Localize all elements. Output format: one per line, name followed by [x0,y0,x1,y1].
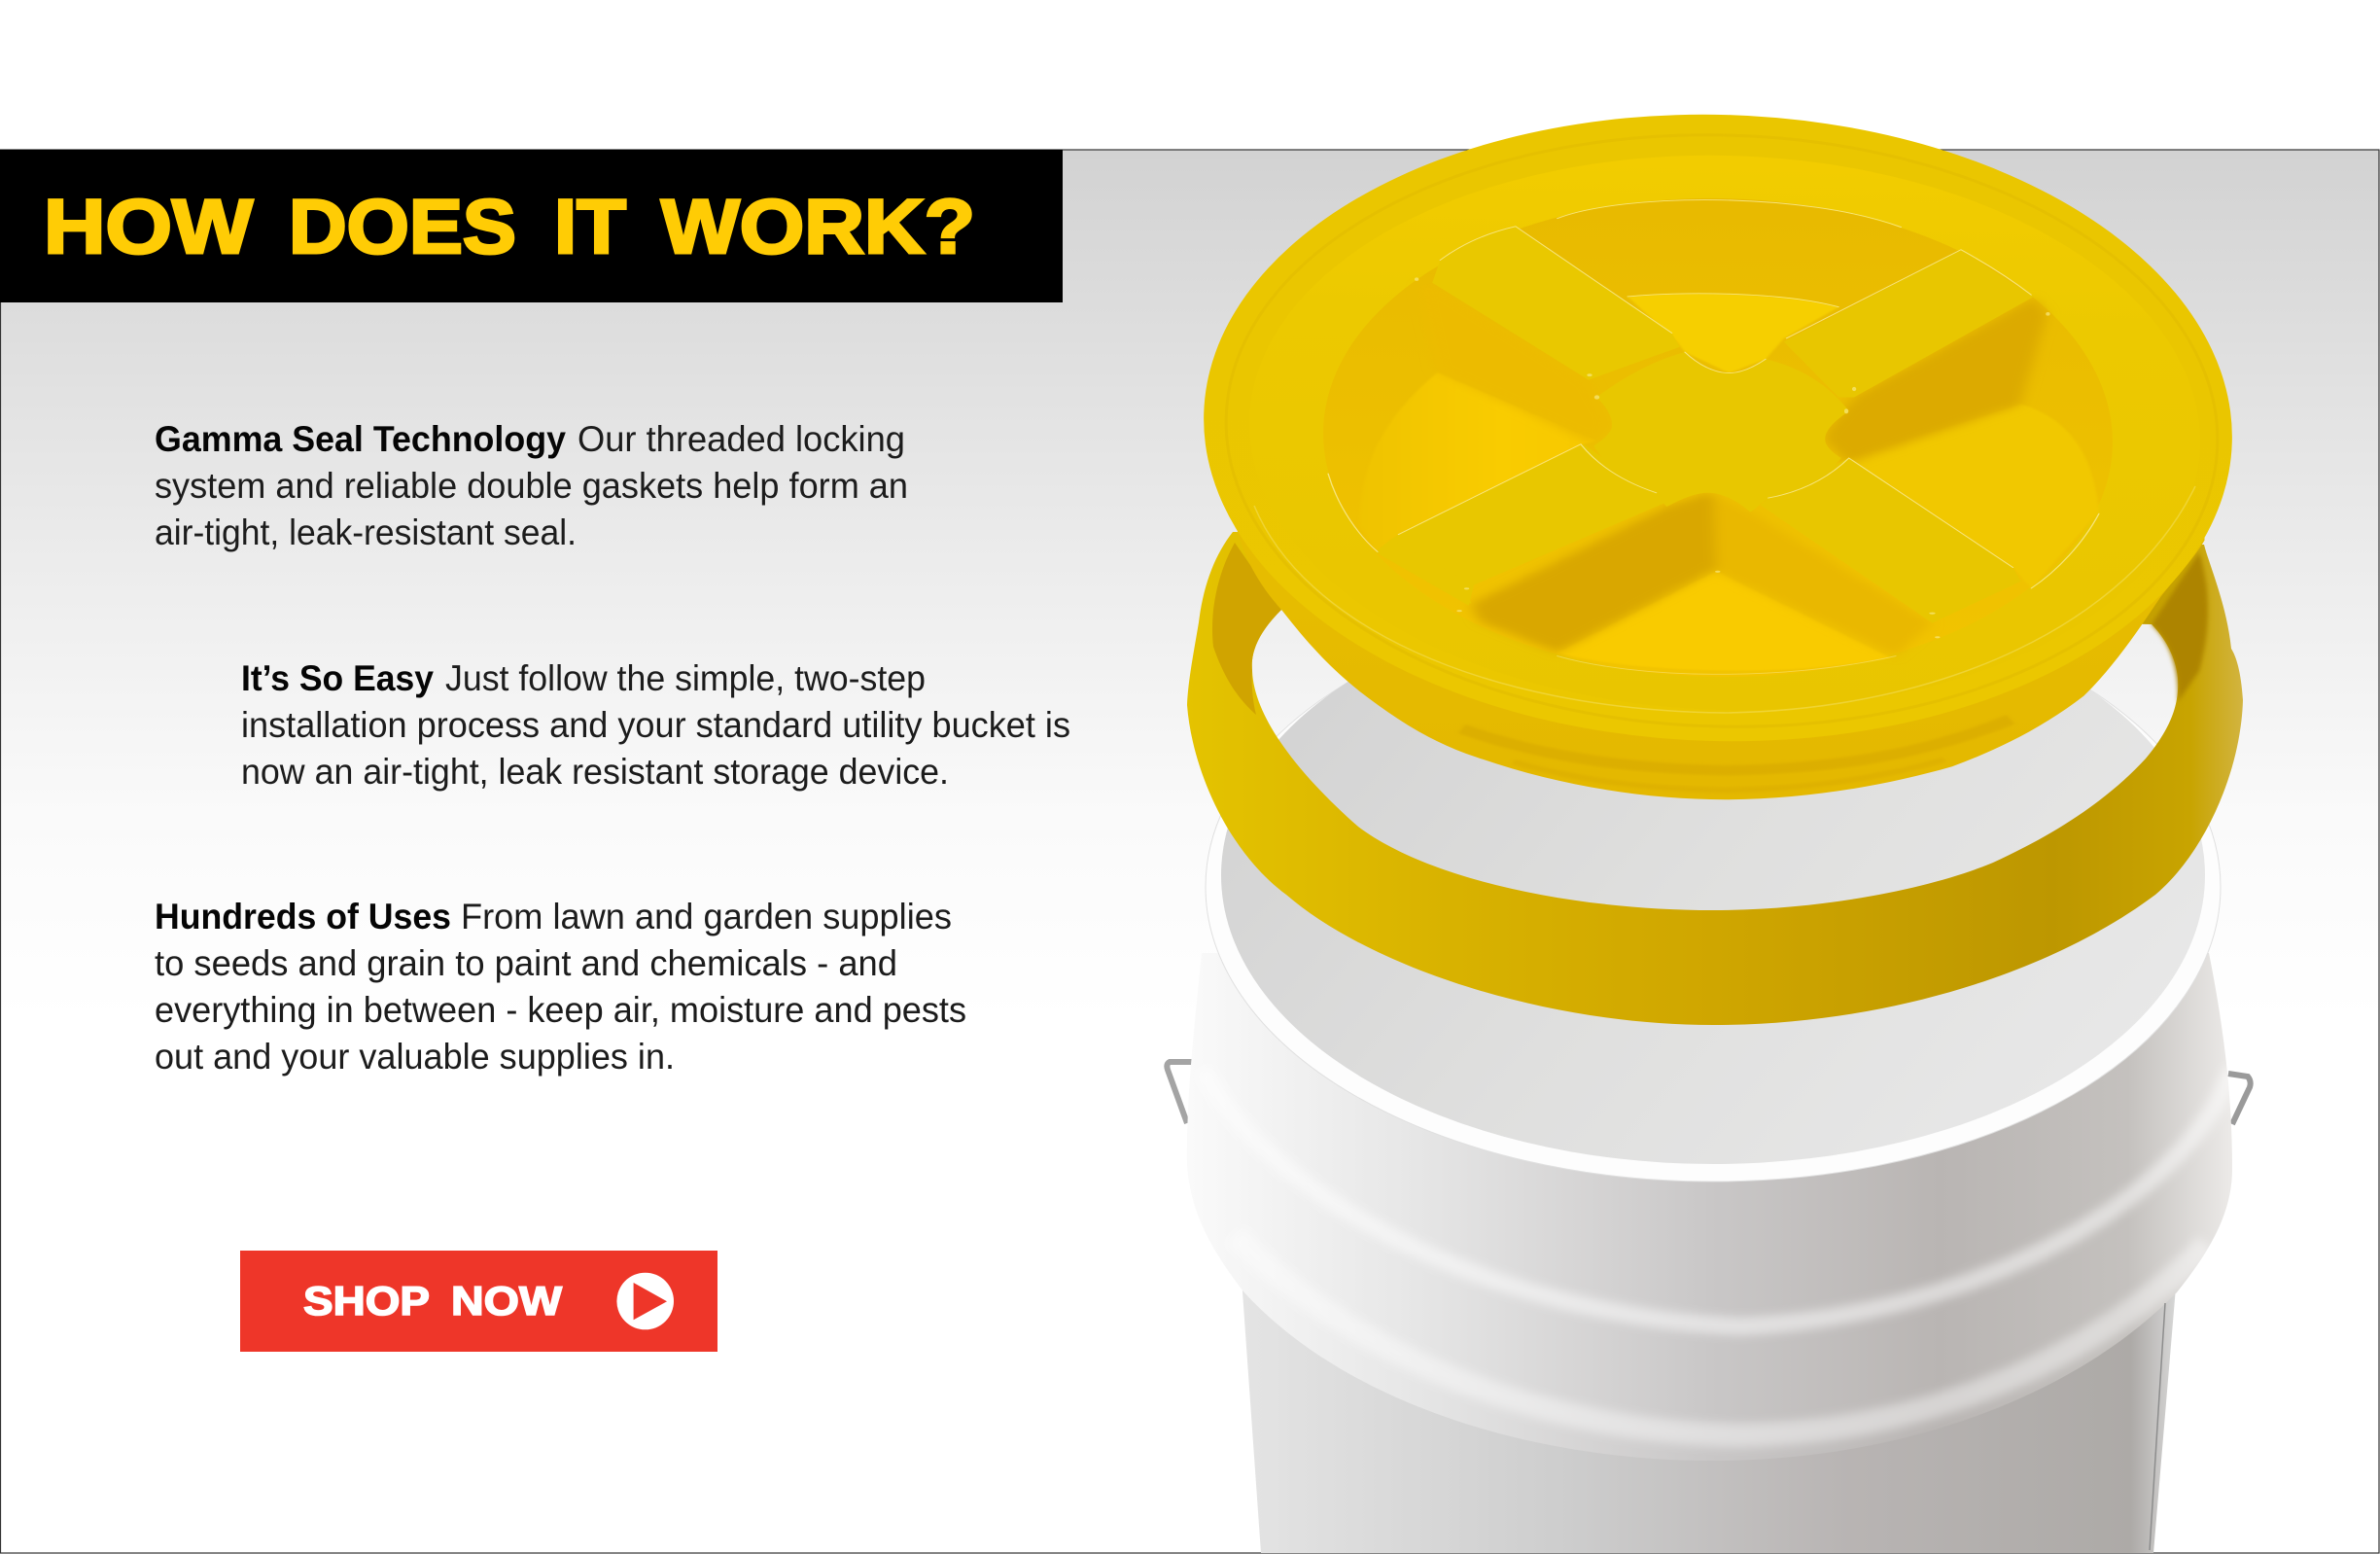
recess shaded walls [1419,283,2047,656]
lid outer rim [1195,100,2241,756]
bucket upper flange [1187,953,2232,1461]
text block: Hundreds of Uses: out and your valuable supplies in. [155,1037,675,1077]
bright recess floors [1359,294,2099,670]
lid inner deck [1242,142,2208,724]
bucket [1167,953,2251,1553]
text block: Hundreds of Uses: everything in between - keep air, moisture and pests [155,990,966,1030]
center hub [1593,352,1849,512]
icon: right wire handle [2228,1074,2251,1124]
heading: DOES [289,183,516,269]
text block: It's So Easy [241,658,1070,792]
heading: IT [554,183,626,269]
icon: left wire handle [1167,1062,1192,1123]
text block: Hundreds of Uses: From lawn and garden supplies [461,897,952,936]
button label: NOW [451,1278,562,1324]
lid rim ridge [1218,122,2225,740]
text block: Hundreds of Uses [155,897,966,1077]
photo: bucket with gamma seal lid [1167,100,2251,1553]
icon: play arrow [616,1273,674,1329]
text block: Gamma Seal Technology [155,419,908,552]
text block: Gamma Seal Technology: system and reliable double gaskets help form an [155,466,908,506]
raised arms [1432,227,1680,380]
text block: It's So Easy: now an air-tight, leak resistant storage device. [241,752,949,792]
lid [1195,100,2241,799]
lid cross detail [1328,200,2099,674]
bucket rim [1206,592,2221,1182]
bucket body [1241,1264,2178,1553]
heading: HOW [44,183,253,269]
lid threaded skirt [1235,380,2205,799]
yellow gasket ring [1187,532,2243,1025]
text block: It's So Easy: Just follow the simple, two-step [445,658,926,698]
text block: It's So Easy: It’s So Easy [241,658,434,698]
title banner [0,150,1063,302]
gasket right inner wall [2152,552,2208,702]
flange ridge highlights [1204,1070,2232,1435]
wall label seam [2150,1303,2165,1550]
button: shop now [240,1251,718,1352]
text block: It's So Easy: installation process and your standard utility bucket is [241,705,1070,745]
heading: WORK? [661,183,975,269]
deck pale edge [1254,486,2195,713]
glossy dots [1415,277,2050,638]
text block: Hundreds of Uses: Hundreds of Uses [155,897,451,936]
skirt thread shadows [1462,720,2011,791]
bucket interior [1221,586,2205,1164]
heading [44,183,975,269]
lid recess [1319,192,2117,684]
gasket left inner wall [1212,543,1281,715]
text block: Gamma Seal Technology: Gamma Seal Technology [155,419,566,459]
text block: Gamma Seal Technology: Our threaded locking [578,419,905,459]
arm edge highlights [1328,200,2099,674]
button label: SHOP [303,1278,430,1324]
text block: Gamma Seal Technology: air-tight, leak-resistant seal. [155,512,577,552]
button label [303,1278,562,1324]
text block: Hundreds of Uses: to seeds and grain to paint and chemicals - and [155,943,897,983]
